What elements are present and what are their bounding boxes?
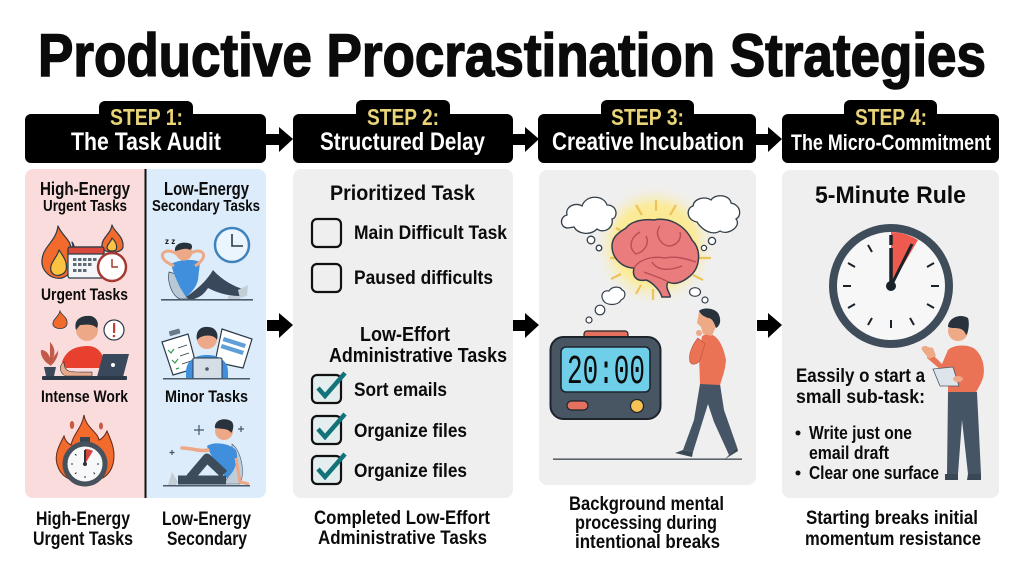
instruction text — [796, 365, 925, 408]
checkbox: paused difficults: Paused difficults — [354, 267, 493, 289]
arrow: panel 1 to panel 2 — [267, 313, 293, 338]
checked item: organize files: Organize files — [354, 460, 467, 482]
icon: reclining person with sparkles — [163, 419, 250, 486]
icon: walking thinking person — [553, 309, 742, 460]
arrow: step 1 to step 2 header — [266, 127, 293, 152]
bullet list — [796, 423, 939, 483]
prioritized heading: Prioritized Task — [330, 182, 475, 205]
step 3 header — [538, 100, 756, 163]
caption: low-energy — [162, 509, 251, 550]
arrow: step 3 to step 4 header — [756, 127, 782, 152]
checkbox: main difficult task: Main Difficult Task — [354, 222, 507, 244]
checkbox: main difficult task — [312, 219, 507, 247]
icon: relaxing person with clock — [161, 228, 253, 301]
urgent tasks label: Urgent Tasks — [41, 285, 128, 304]
step 2 header: Structured Delay — [320, 128, 485, 156]
panel: task audit — [25, 169, 266, 498]
high-energy heading: High-Energy — [40, 179, 130, 199]
icon: relaxing person with clock: z z — [165, 237, 175, 246]
icon: digital timer — [550, 331, 660, 419]
low-effort heading — [329, 324, 507, 367]
bullet list: email draft — [809, 443, 889, 463]
icon: presenting person — [922, 316, 984, 480]
caption: high-energy: Urgent Tasks — [33, 529, 133, 550]
step 1 header — [25, 101, 266, 163]
step 2 header — [293, 100, 513, 163]
low-effort heading: Administrative Tasks — [329, 345, 507, 367]
minor tasks illustration — [162, 327, 252, 380]
caption: creative incubation: Background mental — [569, 494, 724, 515]
icon: person working intensely — [41, 311, 129, 380]
arrow: panel 3 to panel 4 — [757, 313, 782, 338]
checked item: organize files: Organize files — [354, 420, 467, 442]
caption: creative incubation: intentional breaks — [575, 532, 720, 553]
icon: flaming stopwatch — [56, 415, 114, 484]
checked item: organize files — [312, 414, 467, 444]
low-energy heading — [152, 179, 260, 215]
icon: flaming calendar — [42, 225, 126, 281]
checkbox: paused difficults — [312, 264, 493, 292]
arrow: panel 2 to panel 3 — [513, 313, 539, 338]
caption: micro-commitment: Starting breaks initial — [806, 508, 978, 529]
instruction text: small sub-task: — [796, 386, 925, 408]
instruction text: Eassily o start a — [796, 365, 925, 387]
minor tasks label: Minor Tasks — [165, 387, 248, 406]
caption: high-energy — [33, 509, 133, 550]
step 3 header: STEP 3: — [611, 104, 684, 130]
icon: left thought cloud — [561, 197, 616, 251]
step 3 header: Creative Incubation — [552, 128, 744, 156]
step 4 header: STEP 4: — [855, 104, 927, 130]
high-energy heading: Urgent Tasks — [43, 198, 127, 215]
caption: micro-commitment — [805, 508, 981, 550]
caption: low-energy: Low-Energy — [162, 509, 251, 530]
caption: micro-commitment: momentum resistance — [805, 529, 981, 550]
caption: structured delay — [314, 508, 491, 549]
bullet list: Write just one — [809, 423, 912, 443]
panel: structured delay — [293, 169, 513, 498]
low-energy heading: Low-Energy — [164, 179, 249, 199]
five-minute heading: 5-Minute Rule — [815, 182, 966, 209]
high-energy heading — [40, 179, 130, 215]
low-energy heading: Secondary Tasks — [152, 198, 260, 215]
caption: structured delay: Administrative Tasks — [318, 528, 487, 549]
caption: structured delay: Completed Low-Effort — [314, 508, 491, 529]
intense work label: Intense Work — [41, 387, 128, 406]
checked item: organize files — [312, 454, 467, 484]
icon: right thought cloud — [688, 196, 740, 251]
icon: clock — [833, 228, 949, 344]
step 4 header — [782, 100, 999, 163]
icon: glowing brain — [593, 183, 717, 307]
checked item: sort emails: Sort emails — [354, 379, 447, 401]
bullet list: Clear one surface — [809, 463, 939, 483]
caption: high-energy: High-Energy — [36, 509, 130, 530]
low-effort heading: Low-Effort — [360, 324, 450, 346]
checked item: sort emails — [312, 373, 447, 403]
caption: low-energy: Secondary — [167, 529, 247, 550]
icon: thought bubbles — [586, 287, 708, 323]
caption: creative incubation: processing during — [575, 513, 717, 534]
panel: micro-commitment — [782, 170, 999, 498]
step 1 header: STEP 1: — [110, 104, 183, 130]
caption: creative incubation — [569, 494, 724, 553]
panel: creative incubation — [539, 170, 756, 485]
icon: digital timer: 20:00 — [567, 350, 645, 396]
step 2 header: STEP 2: — [367, 104, 439, 130]
arrow: step 2 to step 3 header — [513, 127, 539, 152]
step 1 header: The Task Audit — [71, 128, 222, 156]
